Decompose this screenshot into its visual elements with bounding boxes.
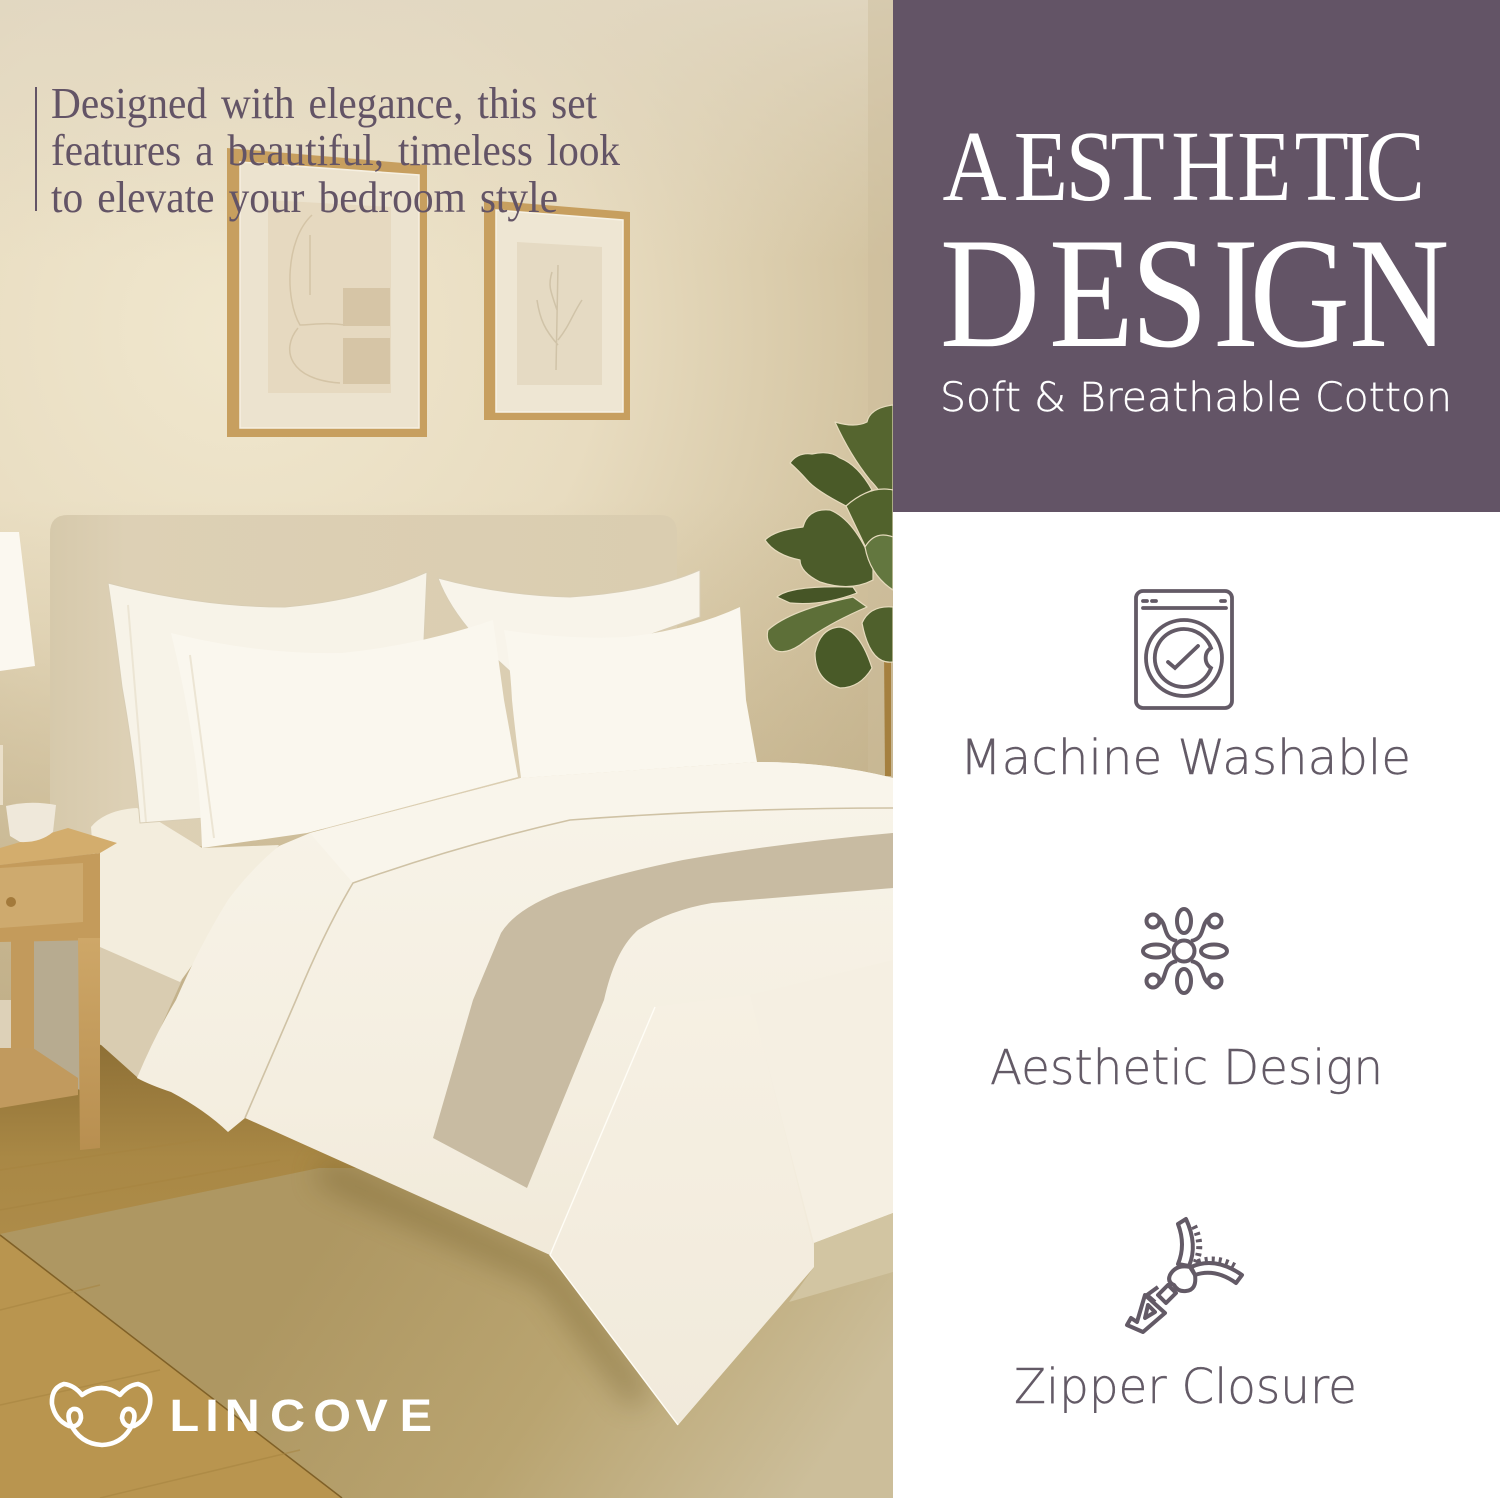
title line 1: AESTHETIC bbox=[942, 110, 1425, 222]
throw blanket bbox=[433, 833, 893, 1188]
subtitle: Soft & Breathable Cotton bbox=[940, 375, 1452, 421]
icon: bear head bbox=[52, 1384, 150, 1445]
panel: heading bbox=[893, 0, 1500, 512]
feature: machine washable bbox=[960, 591, 1411, 786]
intro text block: features a beautiful, timeless look bbox=[51, 126, 620, 175]
label: Zipper Closure bbox=[1014, 1359, 1357, 1415]
feature: zipper closure bbox=[1014, 1219, 1357, 1415]
icon: zipper bbox=[1127, 1219, 1242, 1332]
bed base bbox=[100, 945, 182, 1078]
floor bbox=[0, 1045, 356, 1348]
panel: bedroom photo bbox=[0, 0, 893, 1498]
nightstand bbox=[0, 803, 117, 1150]
pillows bbox=[108, 570, 757, 848]
rug bbox=[0, 1168, 893, 1498]
intro text block: to elevate your bedroom style bbox=[51, 173, 558, 222]
headboard bbox=[50, 515, 677, 860]
wall bbox=[0, 0, 893, 1150]
lamp bbox=[0, 532, 35, 805]
houseplant bbox=[765, 405, 893, 776]
intro text block: Designed with elegance, this set bbox=[51, 79, 597, 128]
logo wordmark: LINCOVE bbox=[170, 1391, 432, 1441]
floor boards bbox=[0, 1284, 300, 1498]
wall art: botanical frame bbox=[484, 200, 630, 420]
intro text block bbox=[35, 79, 620, 222]
title line 2: DESIGN bbox=[940, 206, 1449, 381]
logo: Lincove bbox=[52, 1384, 432, 1445]
bed frame footboard bbox=[789, 1213, 893, 1302]
label: Aesthetic Design bbox=[990, 1040, 1383, 1096]
feature: aesthetic design bbox=[990, 909, 1383, 1096]
fitted sheet bbox=[91, 808, 279, 982]
bed shadow on rug bbox=[320, 1170, 640, 1400]
icon: washing machine bbox=[1136, 591, 1232, 708]
wall art: abstract frame bbox=[227, 148, 427, 437]
duvet bbox=[137, 762, 893, 1425]
label: Machine Washable bbox=[960, 730, 1411, 786]
icon: ornament bbox=[1143, 909, 1227, 993]
